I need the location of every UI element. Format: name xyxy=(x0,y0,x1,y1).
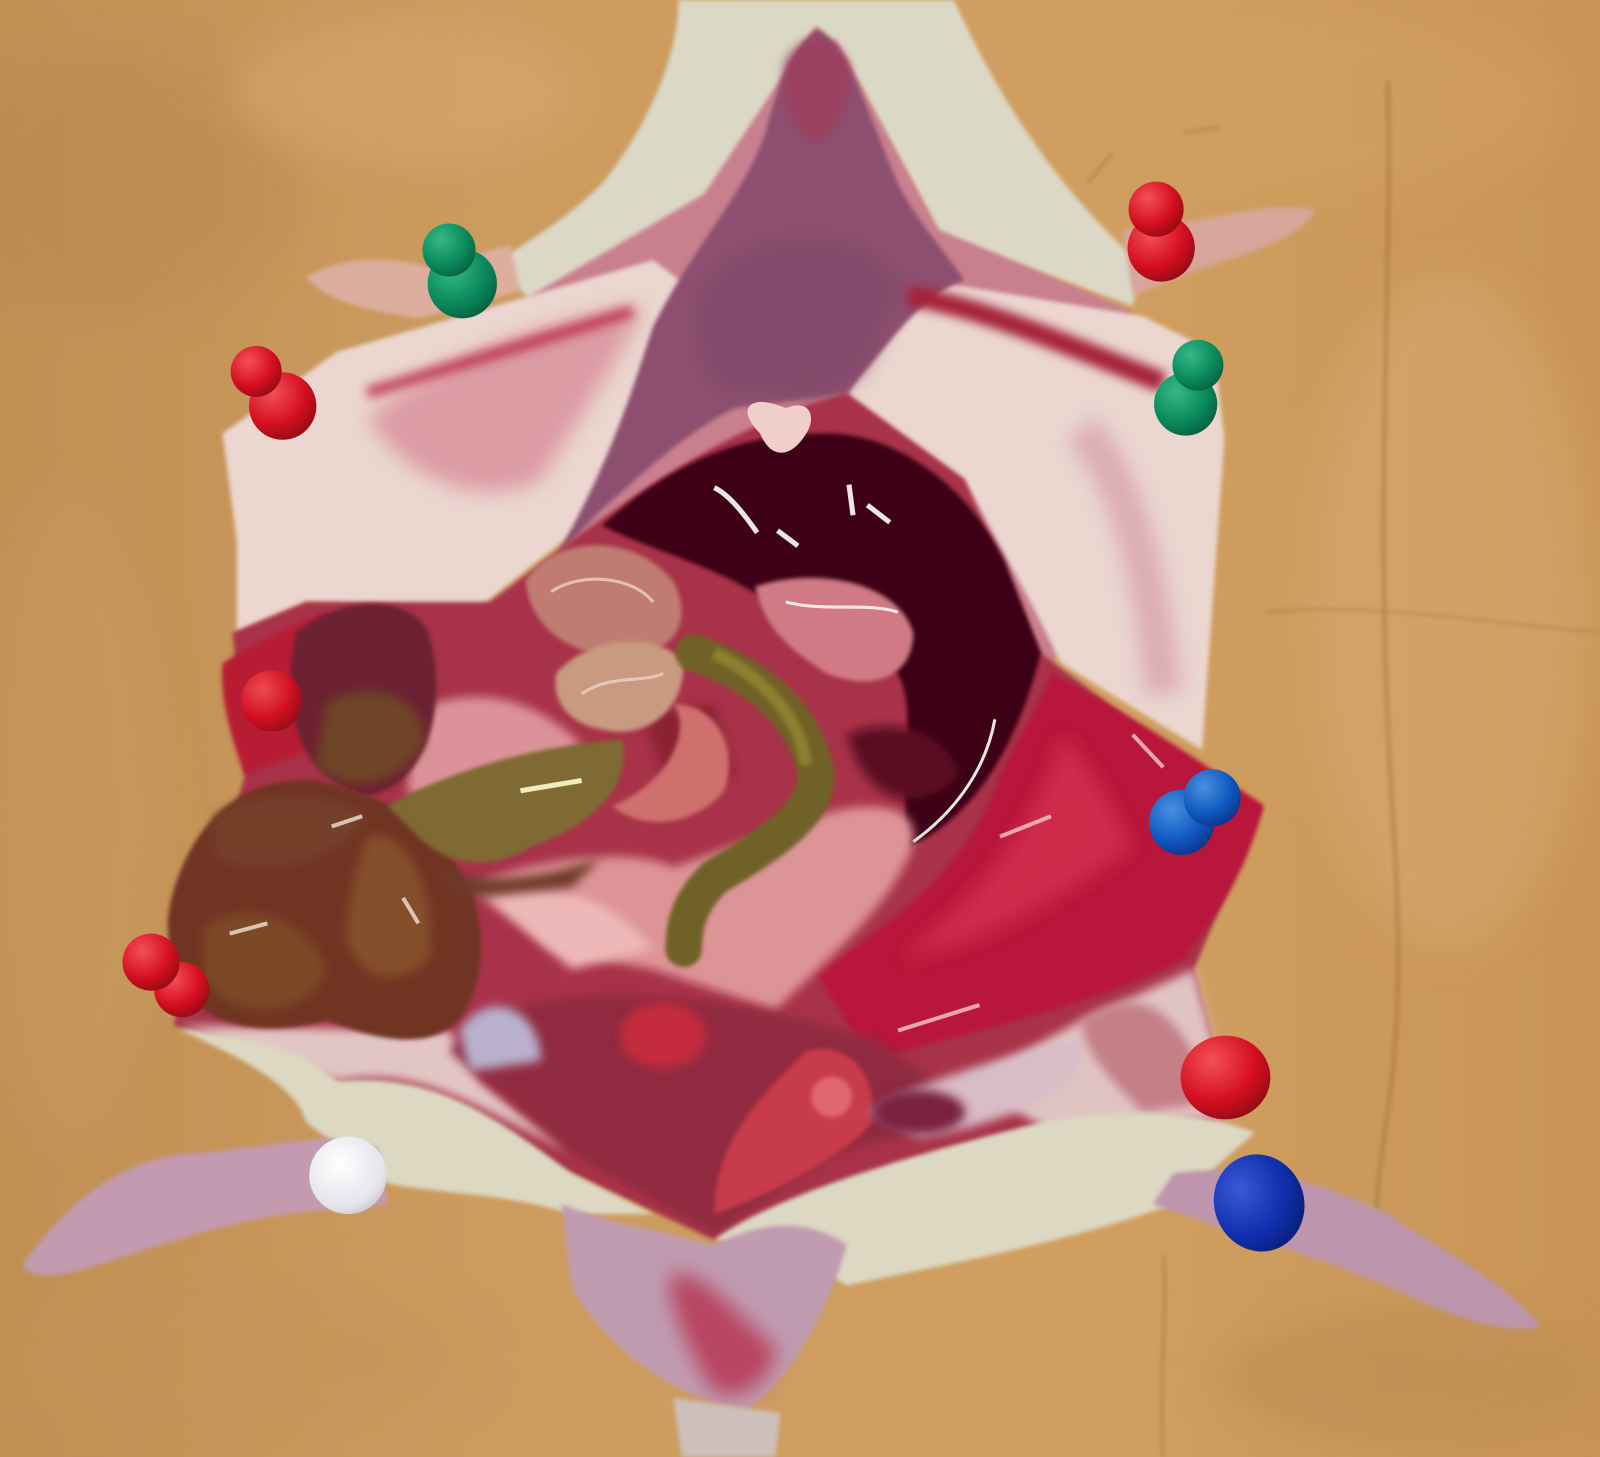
pin: red upper right xyxy=(1128,182,1195,282)
left skin flap xyxy=(223,260,714,633)
lower body fur band xyxy=(179,1028,653,1214)
pale skin strip lower right xyxy=(969,969,1235,1133)
pin: red left shoulder xyxy=(231,346,316,440)
skin flaps and upper chest xyxy=(223,29,1224,750)
tissue underlay beneath chest and flaps xyxy=(531,41,1133,673)
lower right fur band xyxy=(714,1113,1255,1286)
lower pelvic tissue xyxy=(449,995,980,1235)
dark lobes xyxy=(291,604,436,796)
left red tissue xyxy=(222,612,347,775)
front left paw xyxy=(306,245,520,318)
thoracic cavity and liver xyxy=(408,402,1263,1235)
dark lobes under cavity xyxy=(847,727,959,799)
pin: dark blue right leg xyxy=(1200,1142,1318,1264)
muscle wall flap xyxy=(816,673,1263,1061)
upper body fur xyxy=(490,0,1143,306)
pin: green right shoulder xyxy=(1154,340,1223,436)
olive curved tube xyxy=(684,653,816,949)
pin: red lower right xyxy=(1181,1036,1270,1119)
organs: intestines and cecum xyxy=(168,545,913,1040)
pin: red left abdomen xyxy=(241,670,302,732)
hind limb right xyxy=(1153,1170,1541,1329)
pin: green upper left xyxy=(422,223,497,318)
right skin flap xyxy=(847,275,1224,750)
pin: white left leg xyxy=(309,1137,387,1214)
front right paw xyxy=(1122,207,1314,296)
hind limb left xyxy=(23,1138,388,1275)
olive intestine center xyxy=(388,740,624,862)
pin: red lower left xyxy=(123,934,209,1017)
abdominal tissue base xyxy=(174,393,1263,1240)
chest muscle xyxy=(556,29,964,556)
pale skin strip lower left xyxy=(179,1025,571,1153)
cecum mass xyxy=(168,780,481,1040)
small intestine pink xyxy=(526,545,681,655)
pin: blue right flap xyxy=(1149,769,1241,855)
pale connective tissue xyxy=(469,807,914,1010)
tail base and pelvis xyxy=(561,1204,847,1410)
